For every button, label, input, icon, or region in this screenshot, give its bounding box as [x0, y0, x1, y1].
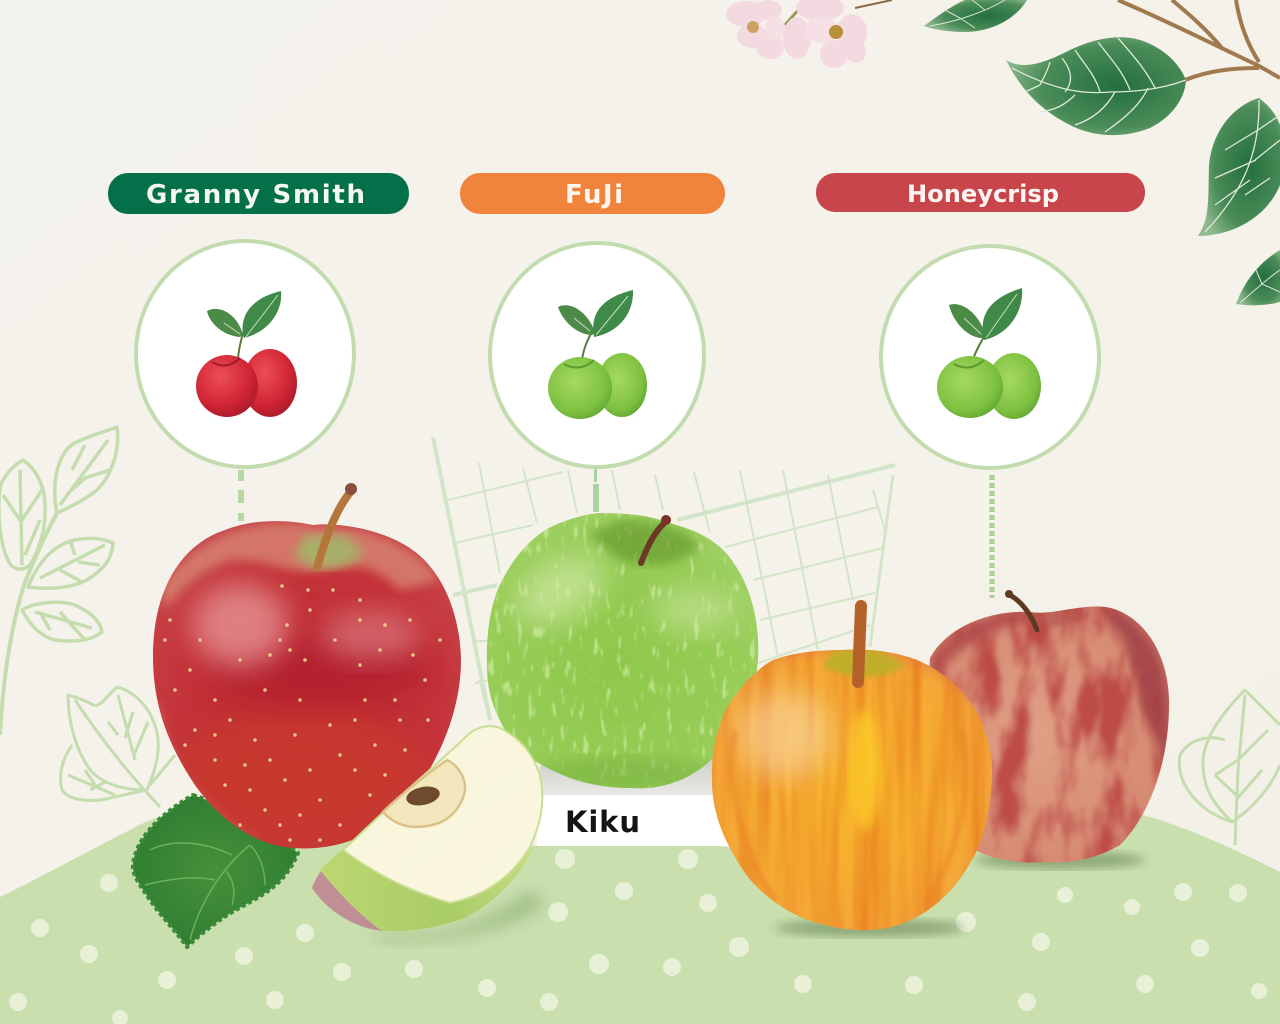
illustration: blossom top [726, 0, 892, 68]
label: Honeycrisp: Honeycrisp [907, 180, 1059, 208]
apple: red stripe [920, 590, 1175, 870]
label: Honeycrisp [816, 173, 1145, 212]
icon: top leaf [924, 0, 1027, 32]
icon circle: green apples right [881, 246, 1099, 468]
label: Fuji: FuJi [565, 180, 623, 210]
icon circle: red apples [136, 241, 354, 467]
connector: right [990, 475, 994, 598]
apple slice [312, 726, 545, 942]
icon: right leaf [1198, 98, 1280, 236]
hill with dots [0, 810, 1280, 1024]
illustration: branch [1118, 0, 1280, 80]
label: Fuji [460, 173, 725, 214]
illustration: perspective grid [433, 437, 895, 720]
label: Kiku plate: Kiku [565, 805, 640, 839]
illustration: right outline leaf [1179, 690, 1280, 845]
apple: orange [705, 606, 997, 937]
connector: middle [593, 468, 599, 512]
icon: edge leaf [1236, 250, 1280, 305]
connector: left [238, 470, 244, 521]
icon: large leaf under apple [133, 795, 298, 947]
label: Granny Smith [108, 173, 409, 214]
illustration: lower left outline leaves [60, 687, 175, 807]
label: Granny Smith: Granny Smith [146, 180, 365, 210]
label: Kiku plate [537, 750, 732, 846]
apple: red [140, 483, 466, 855]
icon: large leaf [1006, 37, 1186, 135]
icon circle: green apples left [490, 243, 704, 467]
apple: green [480, 505, 765, 795]
illustration: left outline sprig [0, 427, 118, 735]
